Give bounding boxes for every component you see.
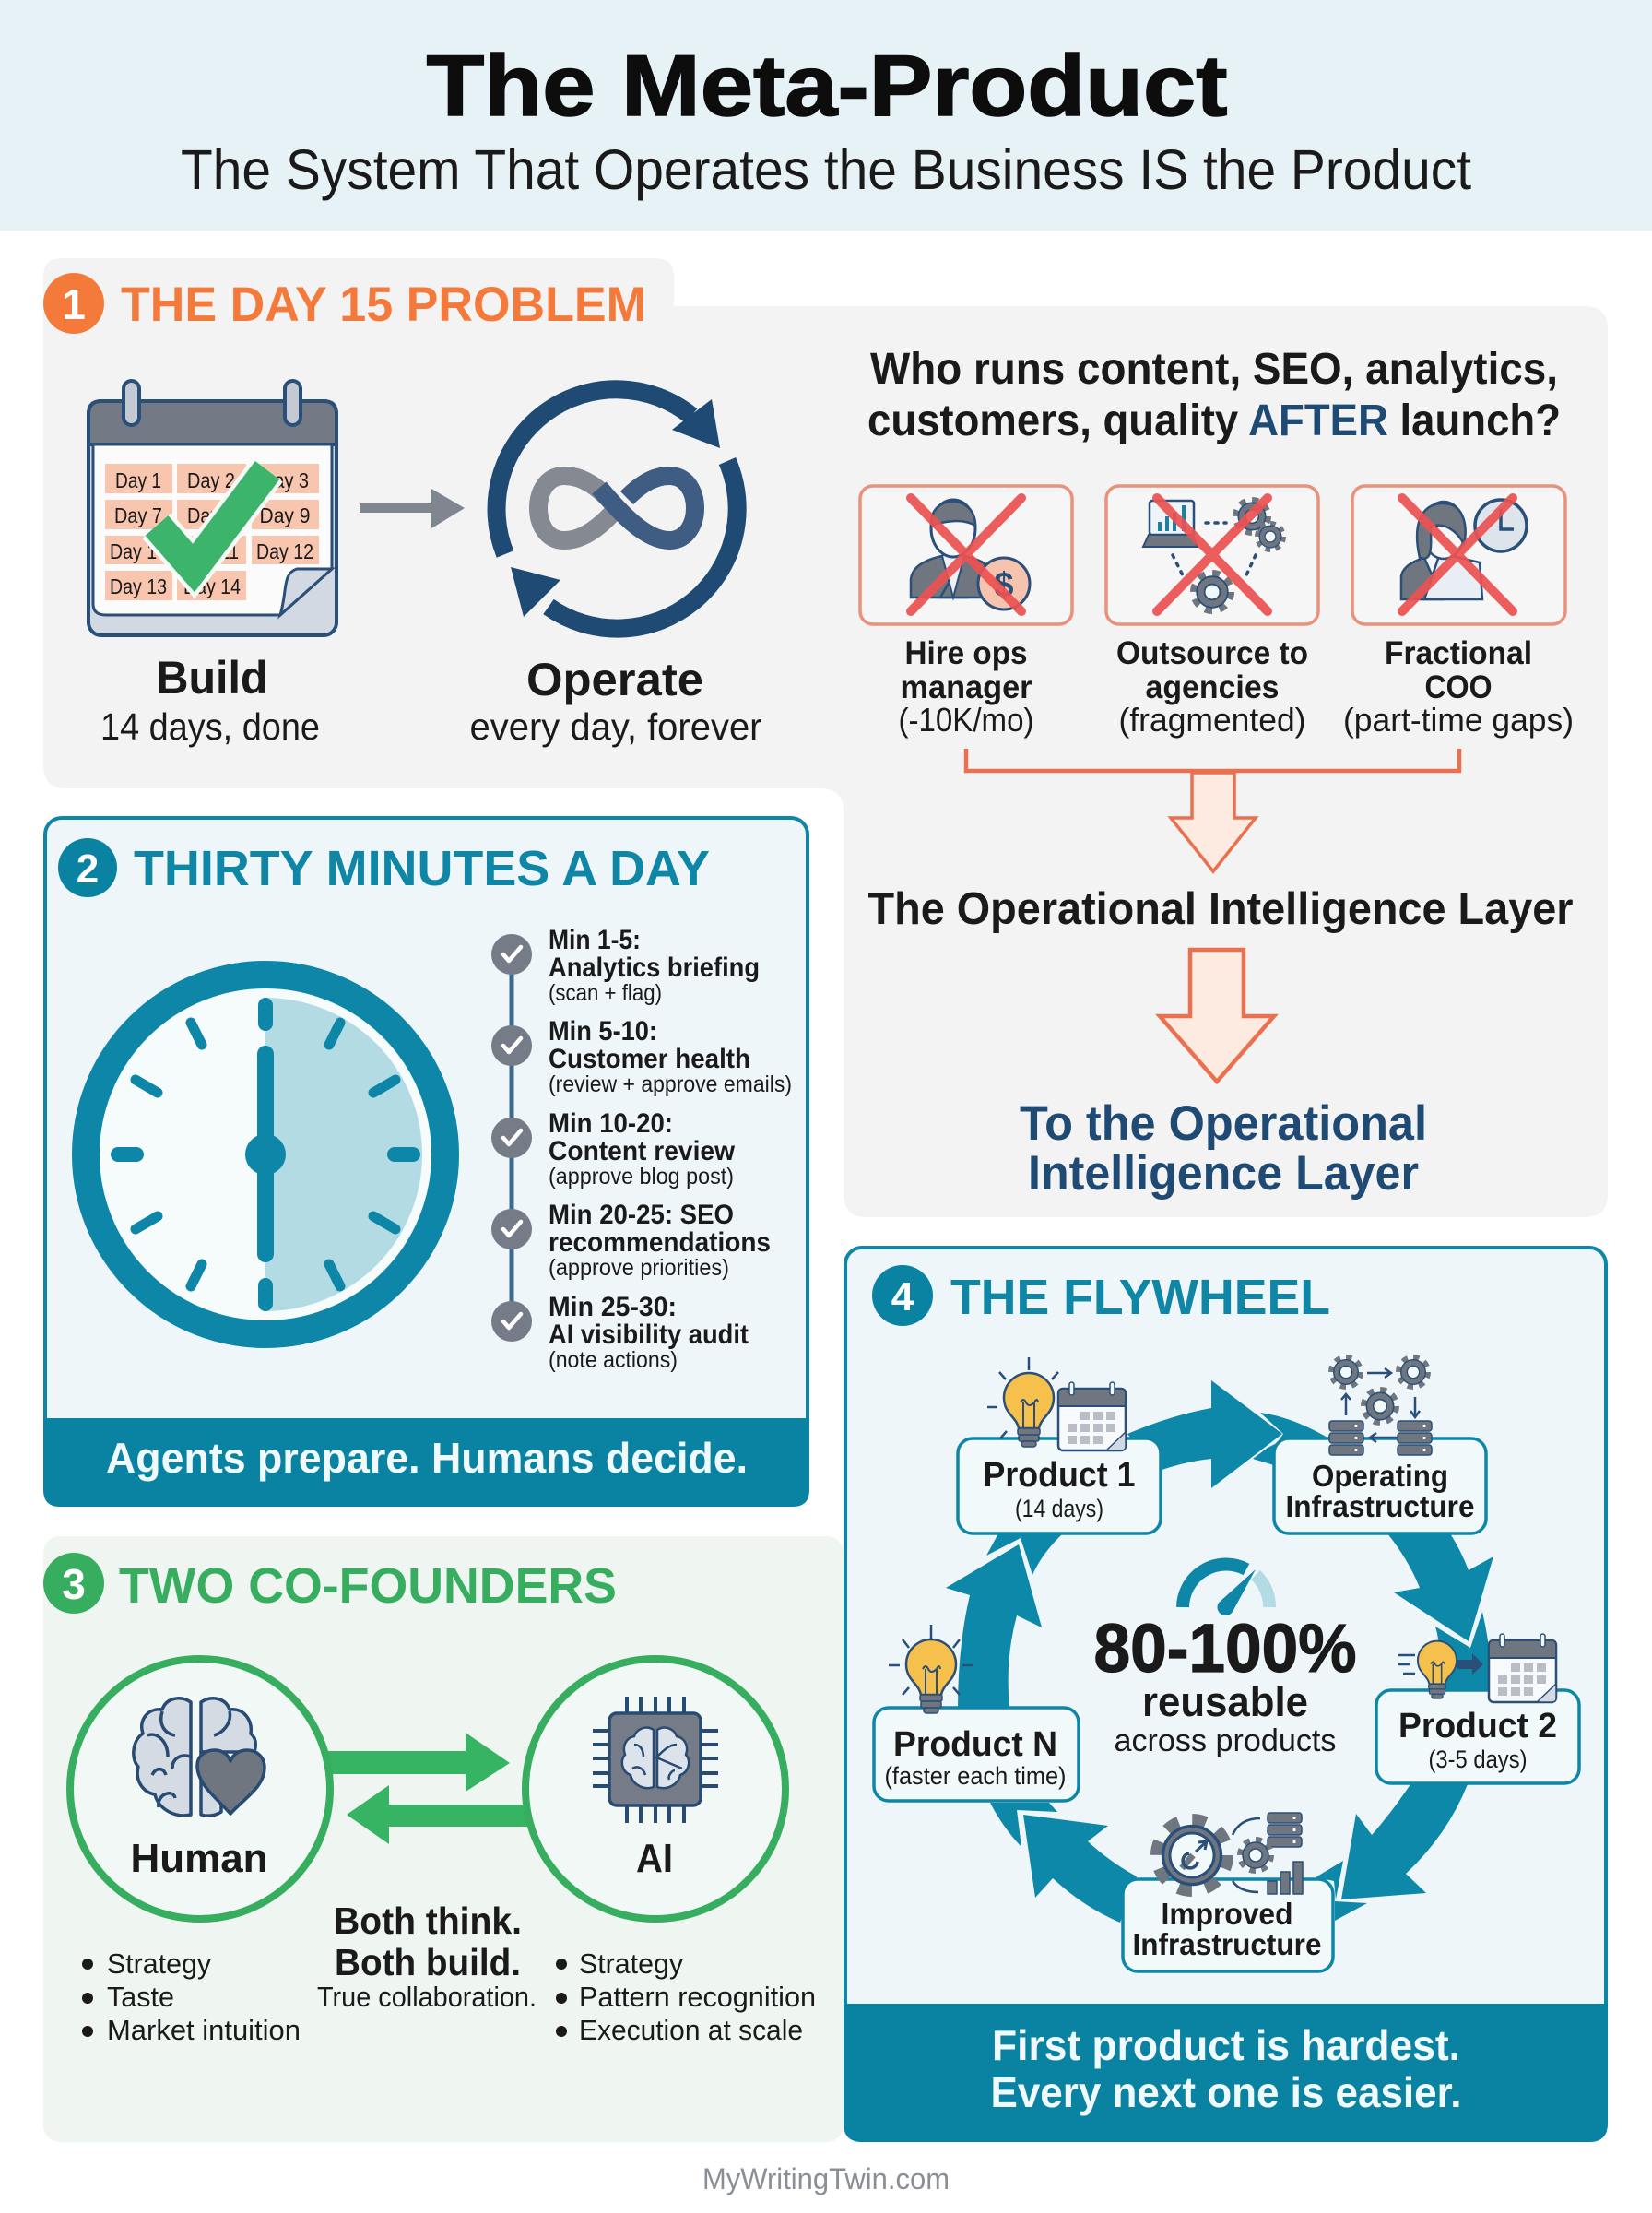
node: operating infrastructure: Infrastructure — [1285, 1489, 1475, 1523]
icon: calendar with check: Day 1 — [115, 468, 161, 492]
node: product 1: Product 1 — [983, 1456, 1136, 1495]
panel 3: two co-founders — [43, 1536, 844, 2142]
section heading 1: THE DAY 15 PROBLEM — [121, 278, 646, 332]
step 2 — [491, 1016, 792, 1097]
step 1: Analytics briefing — [549, 953, 760, 983]
icon: gears and servers — [1329, 1357, 1432, 1455]
reuse statistic — [1093, 1610, 1357, 1758]
option label — [898, 635, 1034, 739]
human traits list: Strategy — [107, 1947, 211, 1980]
ai circle: AI — [636, 1836, 673, 1881]
icon: calendar with check: Day 3 — [261, 468, 309, 492]
operational intelligence layer label: The Operational Intelligence Layer — [868, 884, 1573, 934]
step 4 — [491, 1200, 771, 1281]
step 3: (approve blog post) — [549, 1164, 734, 1189]
option label: manager — [900, 669, 1032, 705]
node: product 1 — [958, 1357, 1161, 1533]
gauge: reusability — [1183, 1565, 1269, 1615]
question: Who runs content, SEO, analytics, — [870, 345, 1558, 394]
option label: COO — [1425, 669, 1492, 705]
build label — [100, 652, 320, 748]
footer band: first product is hardest: First product is hardest. — [992, 2021, 1460, 2069]
section heading 4: THE FLYWHEEL — [950, 1270, 1330, 1325]
icon: calendar with check: Day 10 — [110, 539, 167, 563]
step 3: Min 10-20: — [549, 1108, 673, 1139]
icon: calendar with check — [88, 381, 336, 635]
node: product n: Product N — [893, 1725, 1057, 1764]
icon: fractional coo crossed out — [1401, 498, 1527, 611]
step 2: (review + approve emails) — [549, 1071, 792, 1097]
section heading 2: 2 — [77, 846, 99, 892]
conclusion text: Intelligence Layer — [1028, 1146, 1419, 1201]
icon: calendar with check: Day 12 — [256, 539, 313, 563]
step 3 — [491, 1108, 736, 1189]
build label: Build — [157, 652, 267, 704]
footer: site credit: MyWritingTwin.com — [702, 2162, 950, 2195]
ai traits list: Execution at scale — [579, 2014, 803, 2046]
section heading 3: 3 — [62, 1560, 86, 1608]
footer band: first product is hardest — [844, 2004, 1608, 2142]
icon: brain and heart — [134, 1698, 265, 1816]
question — [867, 345, 1561, 445]
icon: bulb and calendar — [987, 1357, 1126, 1450]
node: improved infrastructure: Infrastructure — [1132, 1927, 1322, 1961]
timeline of daily review — [491, 925, 792, 1373]
footer band: first product is hardest: Every next one is easier. — [990, 2068, 1462, 2116]
step 4: Min 20-25: SEO — [549, 1200, 734, 1230]
ai traits list: Strategy — [579, 1947, 683, 1980]
option label: Hire ops — [905, 635, 1027, 671]
human circle — [70, 1659, 330, 1919]
flywheel arrows — [946, 1380, 1493, 1923]
panel 4: the flywheel — [844, 1248, 1608, 2142]
collaboration message: Both build. — [335, 1941, 521, 1983]
clock showing thirty minutes — [86, 975, 445, 1334]
step 4: recommendations — [549, 1227, 771, 1258]
title: The Meta-Product — [426, 37, 1228, 134]
icon: calendar with check: Day 11 — [183, 539, 239, 563]
step 1: (scan + flag) — [549, 980, 662, 1006]
step 5 — [491, 1292, 749, 1373]
reuse statistic: reusable — [1142, 1678, 1308, 1725]
ai traits list — [556, 1947, 816, 2046]
collaboration message — [317, 1899, 537, 2013]
icon: large gear with servers and bars — [1157, 1813, 1303, 1894]
node: operating infrastructure: Operating — [1312, 1459, 1448, 1493]
icon: manager crossed out — [911, 498, 1030, 611]
conclusion text — [1020, 1096, 1427, 1201]
collaboration message: True collaboration. — [317, 1981, 537, 2013]
option label: (fragmented) — [1119, 701, 1305, 739]
option label: agencies — [1145, 669, 1280, 705]
question: customers, quality AFTER launch? — [867, 396, 1561, 445]
icon: infinity cycle — [497, 389, 738, 629]
step 5: Min 25-30: — [549, 1292, 677, 1322]
human traits list — [82, 1947, 301, 2046]
collaboration message: Both think. — [334, 1899, 522, 1942]
icon: calendar with check: Day 7 — [114, 503, 162, 527]
option label: (-10K/mo) — [898, 701, 1034, 739]
step 3: Content review — [549, 1136, 736, 1166]
operate label — [470, 654, 761, 748]
arrow: build to operate — [360, 489, 465, 528]
footer band: agents prepare: Agents prepare. Humans decide. — [106, 1434, 748, 1482]
option: outsource to agencies — [1106, 486, 1318, 739]
node: operating infrastructure — [1274, 1357, 1486, 1533]
icon: calendar with check: Day 13 — [110, 574, 167, 598]
operate label: Operate — [526, 654, 703, 705]
icon: ai chip with brain — [593, 1697, 718, 1823]
node: product 2: (3-5 days) — [1429, 1746, 1527, 1773]
icon: calendar with check: Day 8 — [187, 503, 235, 527]
option label — [1116, 635, 1308, 739]
node: product 2: Product 2 — [1398, 1707, 1557, 1746]
node: product 1: (14 days) — [1015, 1495, 1103, 1522]
human circle: Human — [131, 1836, 267, 1881]
node: improved infrastructure — [1123, 1813, 1333, 1971]
header band — [0, 0, 1652, 231]
icon: calendar with check: Day 2 — [187, 468, 235, 492]
panel 1: the day 15 problem — [43, 258, 1608, 1217]
section heading 2: THIRTY MINUTES A DAY — [134, 841, 710, 896]
icon: calendar with check: Day 14 — [183, 574, 241, 598]
icon: bulb — [889, 1625, 974, 1713]
human traits list: Market intuition — [107, 2014, 301, 2046]
footer band: agents prepare — [43, 1418, 809, 1507]
node: product 2 — [1376, 1634, 1579, 1783]
exchange arrows — [323, 1733, 535, 1844]
option: hire ops manager — [860, 486, 1072, 739]
option label: Fractional — [1385, 635, 1532, 671]
step 1 — [491, 925, 760, 1006]
subtitle: The System That Operates the Business IS the Product — [181, 138, 1471, 201]
step 2: Min 5-10: — [549, 1016, 657, 1047]
option: fractional coo — [1343, 486, 1574, 739]
section heading 3: TWO CO-FOUNDERS — [119, 1558, 617, 1614]
arrow down 2 — [1160, 950, 1274, 1082]
ai circle — [525, 1659, 785, 1919]
operate label: every day, forever — [470, 705, 761, 748]
node: improved infrastructure: Improved — [1162, 1897, 1292, 1931]
icon: bulb speeding to calendar — [1398, 1634, 1556, 1702]
step 5: (note actions) — [549, 1347, 678, 1373]
node: product n: (faster each time) — [885, 1762, 1066, 1790]
option label: Outsource to — [1116, 635, 1308, 671]
section heading 4: 4 — [891, 1274, 914, 1320]
ai traits list: Pattern recognition — [579, 1981, 816, 2013]
reuse statistic: 80-100% — [1093, 1610, 1357, 1686]
step 1: Min 1-5: — [549, 925, 641, 955]
bracket joining options — [966, 749, 1459, 771]
build label: 14 days, done — [100, 705, 320, 748]
section heading 1: 1 — [62, 280, 86, 328]
icon: agencies crossed out — [1143, 498, 1283, 611]
reuse statistic: across products — [1114, 1723, 1337, 1758]
icon: manager crossed out: $ — [994, 566, 1014, 605]
human traits list: Taste — [107, 1981, 174, 2013]
step 4: (approve priorities) — [549, 1255, 729, 1281]
conclusion text: To the Operational — [1020, 1096, 1427, 1151]
step 5: AI visibility audit — [549, 1320, 749, 1350]
option label — [1343, 635, 1574, 739]
arrow down 1 — [1171, 773, 1256, 871]
step 2: Customer health — [549, 1044, 750, 1074]
panel 2: thirty minutes a day — [43, 818, 809, 1507]
node: product n — [874, 1625, 1079, 1801]
option label: (part-time gaps) — [1343, 701, 1574, 739]
icon: calendar with check: Day 9 — [260, 503, 310, 527]
